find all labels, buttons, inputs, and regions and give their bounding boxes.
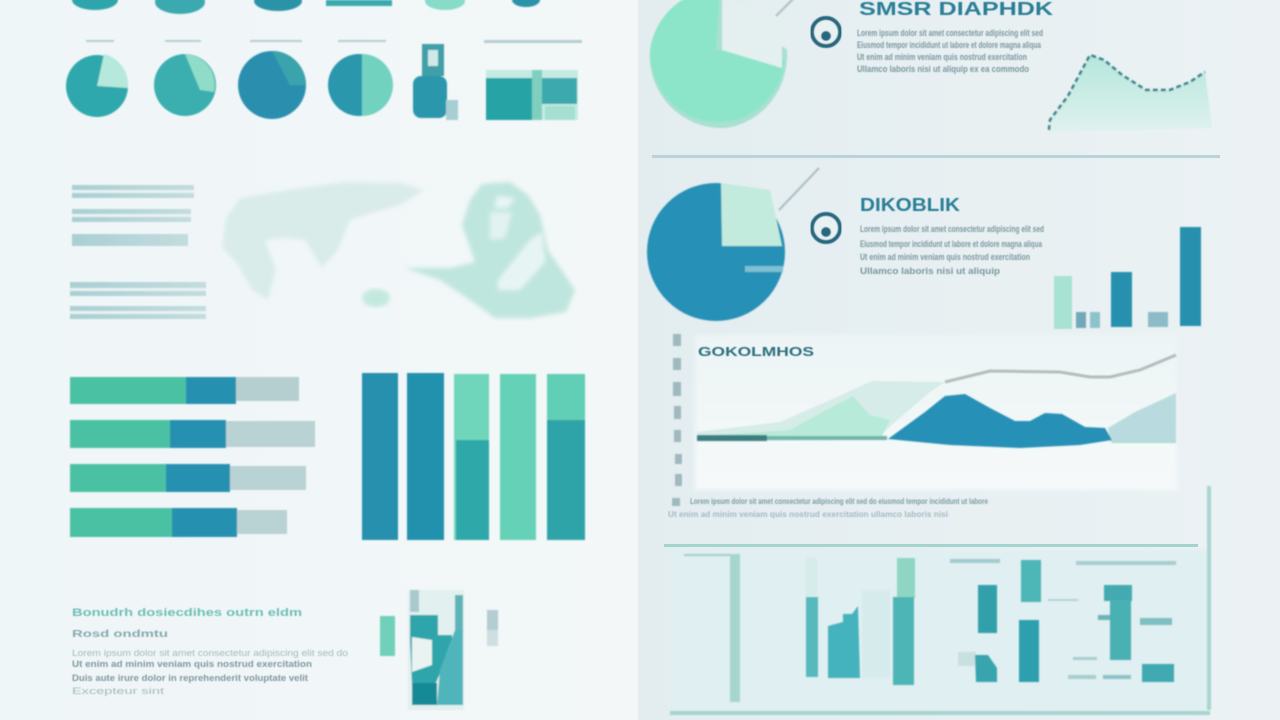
rule above bottom panel [664, 544, 1198, 547]
text block: top right [857, 28, 1043, 74]
small stacked bar chart [486, 70, 578, 120]
fragmented bars [950, 559, 1176, 682]
row of small charts [66, 40, 582, 120]
lower left text block [72, 607, 348, 696]
island [362, 289, 390, 307]
lower left text block: Ut enim ad minim veniam quis nostrud exercitation [72, 659, 312, 669]
small bar chart [1054, 227, 1201, 329]
text block: middle right: Lorem ipsum dolor sit amet consectetur adipiscing elit sed [860, 224, 1044, 234]
text block: top right: Ut enim ad minim veniam quis nostrud exercitation [857, 52, 1027, 62]
right top pie chart [650, 0, 796, 128]
lower left text block: Lorem ipsum dolor sit amet consectetur adipiscing elit sed do [72, 648, 348, 658]
grouped bars [806, 558, 915, 685]
lower left text block: Excepteur sint [72, 686, 165, 696]
text block: middle right: Eiusmod tempor incididunt ut labore et dolore magna aliqua [860, 239, 1043, 249]
lower left text block: Rosd ondmtu [72, 629, 168, 640]
lower left text block: Duis aute irure dolor in reprehenderit voluptate velit [72, 673, 308, 683]
chart caption rules [86, 40, 582, 43]
text block: top right: Lorem ipsum dolor sit amet consectetur adipiscing elit sed [857, 28, 1043, 38]
line and area chart [1048, 55, 1212, 132]
continent left [222, 182, 424, 300]
vertical bars [362, 373, 585, 540]
top row of cropped icons [72, 0, 540, 14]
area series [697, 355, 1176, 448]
axis ticks [672, 334, 682, 506]
icon: target top [812, 18, 840, 46]
pie chart 3 [238, 51, 306, 119]
caption under area chart [668, 497, 988, 519]
bottom right panel with bars [670, 486, 1211, 715]
world map [222, 182, 575, 318]
text block: middle right [860, 224, 1044, 276]
small lower infographic [380, 590, 498, 710]
legend bars [70, 185, 206, 319]
horizontal stacked bars [70, 377, 315, 537]
continent right [405, 182, 575, 318]
caption under area chart: Ut enim ad minim veniam quis nostrud exercitation ullamco laboris nisi [668, 510, 948, 519]
caption under area chart: Lorem ipsum dolor sit amet consectetur adipiscing elit sed do eiusmod tempor incididunt ut labore [690, 497, 988, 506]
chart heading: GOKOLMHOS [698, 344, 814, 359]
pie chart 4 [328, 54, 393, 116]
small figure chart [413, 44, 458, 120]
text block: middle right: Ullamco laboris nisi ut aliquip [860, 266, 1001, 276]
area chart panel [672, 334, 1177, 506]
heading: middle right: DIKOBLIK [860, 195, 960, 215]
divider [652, 155, 1220, 158]
text block: top right: Ullamco laboris nisi ut aliquip ex ea commodo [857, 64, 1029, 74]
icon: target middle [812, 214, 840, 242]
text block: middle right: Ut enim ad minim veniam quis nostrud exercitation [860, 252, 1030, 262]
text block: top right: Eiusmod tempor incididunt ut labore et dolore magna aliqua [857, 40, 1042, 50]
pie chart 2 [154, 54, 216, 116]
right blue pie chart [647, 168, 819, 321]
pie chart 1 [66, 54, 128, 117]
lower left text block: Bonudrh dosiecdihes outrn eldm [72, 607, 302, 619]
